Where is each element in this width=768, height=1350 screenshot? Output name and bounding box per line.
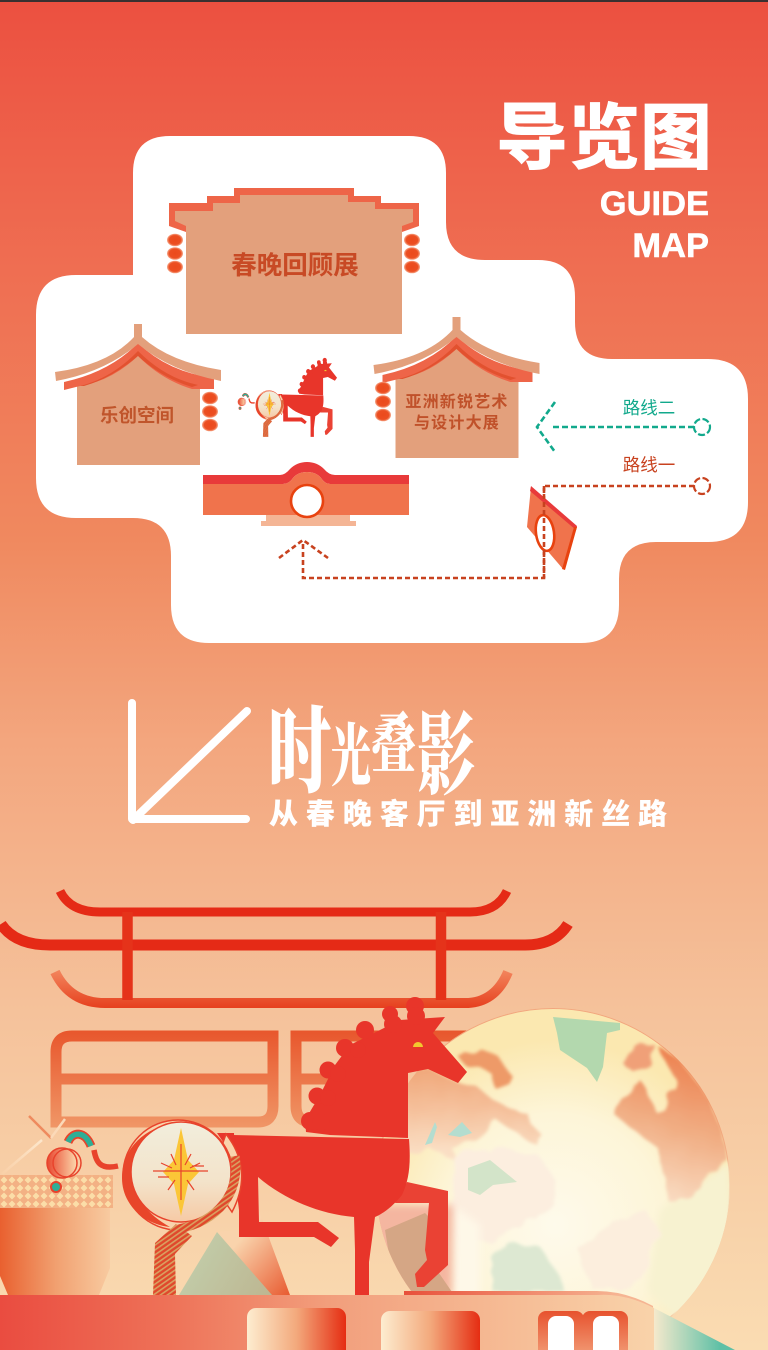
train top strip (404, 1291, 653, 1320)
pavilion shape (55, 324, 221, 465)
side gate right edge (562, 527, 577, 570)
route name: 路线一 (623, 452, 675, 477)
route one label and marker (623, 452, 710, 494)
lanterns (202, 392, 218, 431)
gate body (203, 484, 409, 515)
panel: guide map white area (36, 136, 748, 643)
label: 乐创空间 (100, 402, 174, 428)
cream glow left of globe (453, 1216, 479, 1291)
arrow icon: white corner arrow (132, 703, 247, 820)
side gate top edge (530, 486, 577, 530)
lanterns right (404, 234, 420, 273)
title: chinese heading: 导览图 (496, 79, 712, 184)
baffin island (623, 1042, 653, 1075)
south america (580, 1215, 660, 1286)
route name: 路线二 (623, 395, 675, 420)
train window one (247, 1308, 346, 1350)
europe landmass (400, 1070, 540, 1160)
pavilion: asian art and design (374, 317, 540, 458)
train door (538, 1311, 628, 1350)
title: GUIDE: GUIDE (600, 185, 709, 223)
route two dashed line (537, 402, 694, 452)
label: 春晚回顾展 (231, 245, 359, 282)
illustration: train (0, 1291, 654, 1350)
heading: brush calligraphy: 叠 (371, 692, 416, 787)
greenland (553, 1017, 620, 1082)
pavilion shape (374, 317, 540, 458)
gate base (261, 515, 356, 526)
middle east green (468, 1160, 517, 1195)
entrance gate front view (203, 462, 409, 526)
pavilion: creative music space (55, 324, 221, 465)
globe base (378, 1008, 730, 1317)
lanterns (375, 382, 391, 421)
southern green land (493, 1243, 565, 1292)
start circle (694, 419, 710, 435)
pavilion: spring gala retrospective (167, 188, 420, 334)
illustration: red horse with drum (47, 997, 467, 1295)
side gate panel (527, 487, 577, 569)
vase body (0, 1208, 110, 1295)
illustration: globe (378, 1008, 730, 1317)
train body (0, 1295, 654, 1350)
title: MAP: MAP (632, 227, 709, 265)
route through gate (543, 486, 545, 578)
north america (613, 1045, 727, 1203)
title: guide map (496, 79, 712, 265)
heading: brush calligraphy: 时 (268, 676, 332, 811)
train window two (381, 1311, 480, 1350)
illustration: teal hill (654, 1308, 735, 1350)
illustration: triangles (179, 1208, 290, 1295)
heading: brush calligraphy: 影 (417, 683, 475, 812)
gate top band (203, 462, 409, 484)
heading: brush calligraphy (268, 676, 475, 812)
vase lattice band (0, 1175, 113, 1208)
route one dashed line (279, 486, 694, 578)
side gate entrance (527, 486, 577, 578)
start circle (694, 478, 710, 494)
label line 2: 与设计大展 (414, 409, 500, 433)
route two label and marker (623, 395, 710, 435)
illustration: vase (0, 1116, 113, 1295)
label line 1: 亚洲新锐艺术 (405, 388, 509, 412)
side gate opening (534, 514, 556, 552)
brown continent lower left (385, 1213, 452, 1292)
inland seas (425, 1122, 472, 1145)
small horse and drum (238, 358, 337, 437)
pavilion body (175, 195, 413, 334)
africa (453, 1147, 557, 1243)
subtitle: 从春晚客厅到亚洲新丝路 (269, 791, 675, 833)
vase sticks (29, 1116, 51, 1138)
illustration: gate roof lines (1, 891, 568, 1003)
pink continent lower left (373, 1205, 453, 1295)
teal sliver (388, 1258, 408, 1295)
gate opening (291, 485, 323, 517)
lower right pale ocean (657, 1159, 730, 1317)
lanterns left (167, 234, 183, 273)
scandinavia (457, 1048, 513, 1090)
illustration: window frames (56, 1036, 480, 1122)
pavilion roof (169, 188, 419, 240)
heading: brush calligraphy: 光 (331, 702, 371, 800)
